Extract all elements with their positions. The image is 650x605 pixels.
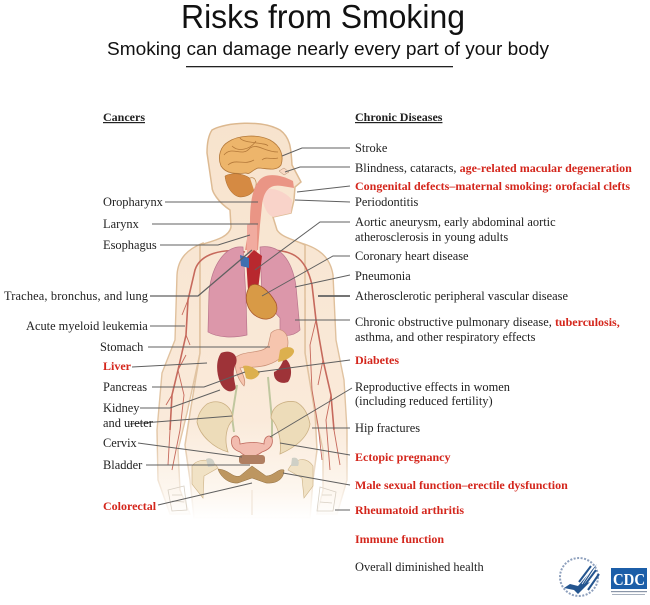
chronic disease labels: Hip fractures	[355, 421, 420, 435]
chronic disease labels: Diabetes	[355, 353, 399, 367]
cancer labels: Esophagus	[103, 238, 157, 252]
groin line	[251, 490, 253, 515]
chronic disease labels: Stroke	[355, 141, 388, 155]
chronic disease labels: Coronary heart disease	[355, 249, 469, 263]
subtitle rule	[186, 66, 453, 67]
left arm	[157, 243, 203, 514]
cancer labels: Pancreas	[103, 380, 147, 394]
chronic disease labels: asthma, and other respiratory effects	[355, 330, 536, 344]
ureters	[232, 377, 272, 438]
icon: CDC logo	[611, 568, 647, 595]
cancer labels: Colorectal	[103, 499, 157, 513]
hip joints	[206, 458, 299, 467]
hands	[168, 486, 336, 511]
aorta and vein	[246, 250, 262, 290]
pancreas and spleen	[243, 347, 294, 379]
airway and throat	[245, 175, 294, 250]
trachea	[247, 224, 257, 254]
stomach	[235, 330, 288, 386]
chronic disease labels	[355, 141, 632, 574]
chronic disease labels: Chronic obstructive pulmonary disease, tuberculosis,	[355, 315, 620, 329]
cancer labels: Trachea, bronchus, and lung	[4, 289, 148, 303]
chronic disease labels: Ectopic pregnancy	[355, 450, 450, 464]
cancer labels: Bladder	[103, 458, 143, 472]
arm arteries	[166, 250, 340, 470]
chronic disease labels: Pneumonia	[355, 269, 411, 283]
leader lines	[130, 148, 352, 510]
chronic disease labels: Overall diminished health	[355, 560, 484, 574]
cancer labels: Kidney	[103, 401, 140, 415]
lungs	[208, 247, 247, 337]
cancer labels: Liver	[103, 359, 132, 373]
femur heads	[192, 460, 313, 498]
torso and head	[185, 123, 317, 518]
subtitle: Smoking can damage nearly every part of your body	[107, 39, 549, 59]
pubic bones	[218, 466, 284, 483]
chronic disease labels: Congenital defects–maternal smoking: orofacial clefts	[355, 179, 630, 193]
liver and kidneys	[217, 352, 237, 391]
eye	[279, 168, 289, 175]
pelvis	[197, 402, 310, 454]
chronic disease labels: Aortic aneurysm, early abdominal aortic	[355, 215, 556, 229]
chronic disease labels: Immune function	[355, 532, 444, 546]
bladder	[239, 455, 265, 464]
body illustration	[157, 123, 347, 518]
cancer labels	[4, 195, 164, 513]
uterus and ovaries	[231, 436, 272, 456]
chronic disease labels: Male sexual function–erectile dysfunction	[355, 478, 568, 492]
cancer labels: and ureter	[103, 416, 154, 430]
brain	[219, 136, 282, 197]
icon: CDC logo: CDC	[613, 570, 645, 589]
chronic disease labels: Blindness, cataracts, age-related macular degeneration	[355, 161, 632, 175]
mouth and pharynx	[262, 189, 292, 217]
chronic disease labels: Periodontitis	[355, 195, 419, 209]
chronic disease labels: Rheumatoid arthritis	[355, 503, 464, 517]
cancer labels: Larynx	[103, 217, 140, 231]
cancer labels: Oropharynx	[103, 195, 164, 209]
chronic disease labels: (including reduced fertility)	[355, 394, 493, 408]
heart	[246, 284, 277, 319]
chronic disease labels: atherosclerosis in young adults	[355, 230, 508, 244]
chronic diseases heading: Chronic Diseases	[355, 110, 443, 124]
cancer labels: Acute myeloid leukemia	[26, 319, 148, 333]
chronic disease labels: Atherosclerotic peripheral vascular disease	[355, 289, 568, 303]
icon: HHS eagle logo	[560, 558, 599, 596]
cancer labels: Cervix	[103, 436, 138, 450]
cancer labels: Stomach	[100, 340, 144, 354]
cancers heading: Cancers	[103, 110, 145, 124]
right arm	[301, 243, 347, 514]
chronic disease labels: Reproductive effects in women	[355, 380, 510, 394]
